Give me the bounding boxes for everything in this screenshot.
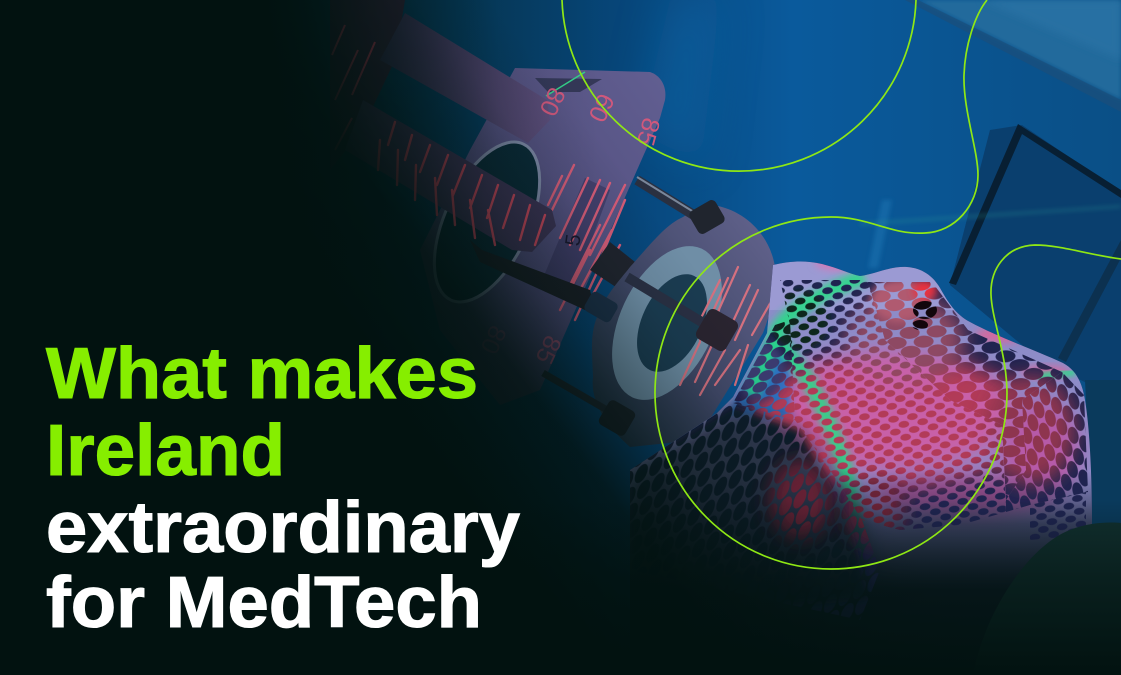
lower ring body [592,205,775,447]
title line 1: What makes [46,334,478,414]
decorative green outline curves [562,0,1121,569]
plate slot [535,78,602,92]
top circle [562,0,916,171]
ring tick marks [680,267,772,395]
title [46,334,520,643]
plate numerals: 85 [631,115,665,149]
lower thick rod with ticks [345,100,556,252]
lower dimming on mask [717,474,1092,664]
large circle joined to upper wavy line [655,0,1007,569]
green nose-bridge highlights [1030,372,1075,378]
plate numerals: 80 [475,321,512,358]
main graduated plate [420,68,665,405]
upper thick rod [380,13,550,143]
plate numerals [475,83,665,368]
stereotactic frame instrument [330,0,775,447]
rear structure with red ticks [330,0,405,170]
plate recessed window [540,178,610,298]
lattice of the mask [630,262,1092,636]
title line 4: for MedTech [46,563,482,643]
plate tick marks [548,165,625,320]
metal rods [637,180,697,217]
lower right wavy outline [991,245,1121,393]
plate hole ring [413,126,561,318]
title line 2: Ireland [46,411,285,491]
white ring around opening [590,229,744,417]
rod clamps [688,198,726,236]
green laser line [750,277,864,570]
plate numerals: 85 [530,331,567,368]
colour seen through mesh holes [630,262,1088,620]
numeral 5: 5 [561,233,586,247]
plate numerals: 80 [534,83,571,120]
title line 3: extraordinary [46,488,520,568]
lower-left shadow on mask [630,393,870,561]
plate numerals: 60 [583,89,620,126]
patient face mesh mask [630,262,1092,658]
thick dark connector [590,242,635,295]
